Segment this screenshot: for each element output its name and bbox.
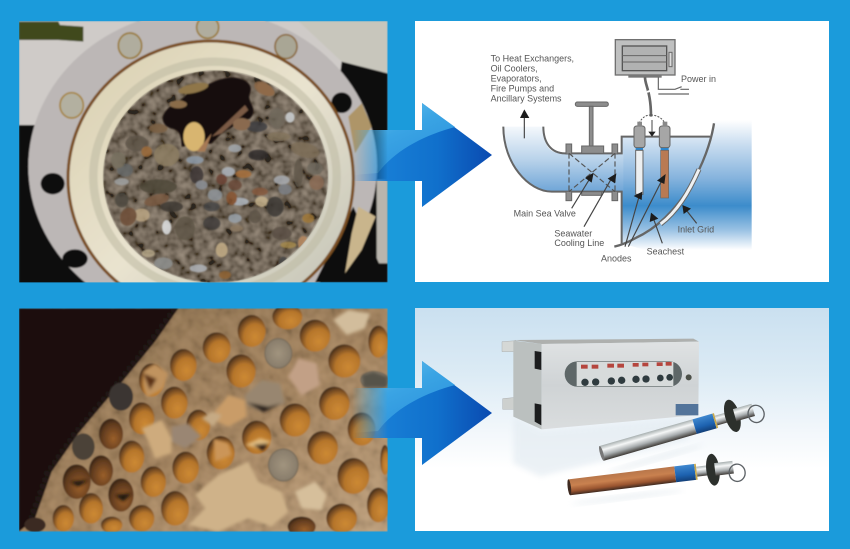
fouling debris: [70, 310, 388, 532]
anodes: [634, 122, 670, 198]
diagram labels: Evaporators,: [491, 74, 542, 84]
copper anode: [566, 450, 747, 507]
arrow: top, problem to solution: [340, 103, 492, 207]
photo: corroded and fouled heat exchanger tube plate: [19, 304, 390, 537]
photo: seawater intake pipe clogged with mussels: [19, 10, 388, 323]
dark opening in mussel mass: [163, 77, 277, 152]
sea water around seachest: [622, 120, 752, 250]
diagram labels: Anodes: [601, 253, 632, 263]
diagram labels: To Heat Exchangers,: [491, 54, 574, 64]
arrow: bottom, problem to solution: [340, 361, 492, 465]
diagram labels: Cooling Line: [554, 238, 604, 248]
diagram labels: [491, 54, 716, 263]
cooling line water: [503, 127, 623, 192]
main sea valve: [566, 102, 618, 201]
inlet grid bar: [661, 169, 699, 224]
aluminium anode: [595, 391, 769, 476]
maker plate: [676, 404, 698, 415]
reflection under control panel: [513, 417, 698, 477]
panel: control panel and anode product photo: [415, 308, 829, 531]
diagram labels: Ancillary Systems: [491, 94, 562, 104]
tube openings: [24, 304, 390, 537]
diagram labels: Main Sea Valve: [514, 208, 576, 218]
diagram labels: Oil Coolers,: [491, 64, 538, 74]
leader arrows: [520, 109, 697, 247]
diagram labels: Seachest: [647, 246, 685, 256]
diagram labels: Inlet Grid: [678, 225, 714, 235]
mussel mass texture: [102, 70, 332, 283]
diagram labels: Power in: [681, 74, 716, 84]
panel: seawater system diagram: [415, 21, 829, 282]
diagram labels: Seawater: [554, 229, 592, 239]
electronic control panel: [615, 40, 689, 137]
hull and pipe outlines: [503, 123, 714, 247]
diagram labels: Fire Pumps and: [491, 84, 554, 94]
control panel cabinet: [502, 339, 699, 429]
